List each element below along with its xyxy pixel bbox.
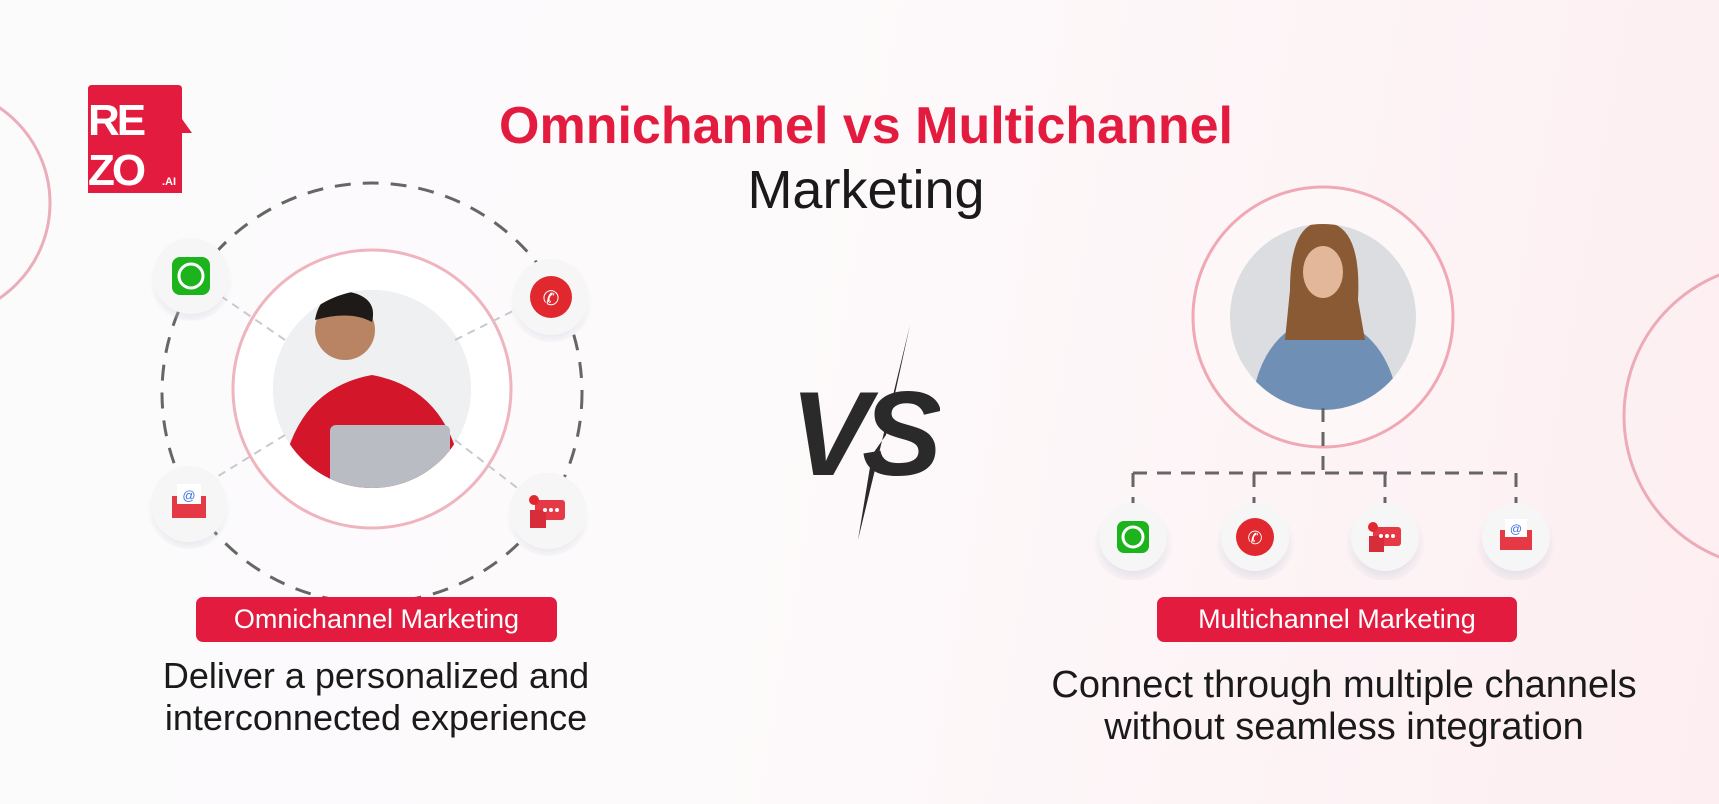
dashed orbit [162,183,582,603]
logo: RE [88,96,145,145]
text: omnichannel description: Deliver a personalized and [163,655,589,696]
tree connectors [1133,408,1516,505]
panel: omnichannel diagram [153,182,588,597]
title: Marketing [747,160,985,220]
photo ring [1193,187,1453,447]
label: omnichannel: Omnichannel Marketing [234,604,519,634]
icon: email: @ [182,488,196,503]
icon: email [1476,501,1556,581]
icon: phone: ✆ [1247,528,1263,548]
title: Omnichannel vs Multichannel [499,97,1233,155]
label: omnichannel [196,597,557,642]
arrows [215,292,525,490]
icon: email: @ [1510,522,1522,536]
photo ring [233,250,511,528]
icon: VS [790,326,940,540]
panel: multichannel diagram [1098,186,1551,580]
icon: whatsapp [149,237,233,321]
icon: email [147,465,231,549]
label: multichannel: Multichannel Marketing [1198,604,1476,634]
title [499,97,1233,220]
icon: phone: ✆ [543,288,559,310]
icon: VS: VS [790,367,940,501]
text: omnichannel description: interconnected experience [165,697,587,738]
icon: phone [1215,501,1295,581]
icon: chat [506,472,590,556]
text: multichannel description [1051,664,1637,748]
icon: phone [509,258,593,342]
logo [88,85,192,193]
icon: chat [1345,501,1425,581]
label: multichannel [1157,597,1517,642]
text: multichannel description: Connect through multiple channels [1051,664,1637,706]
text: omnichannel description [163,655,589,738]
logo: .AI [162,176,176,188]
text: multichannel description: without seamless integration [1104,706,1584,748]
icon: whatsapp [1093,501,1173,581]
